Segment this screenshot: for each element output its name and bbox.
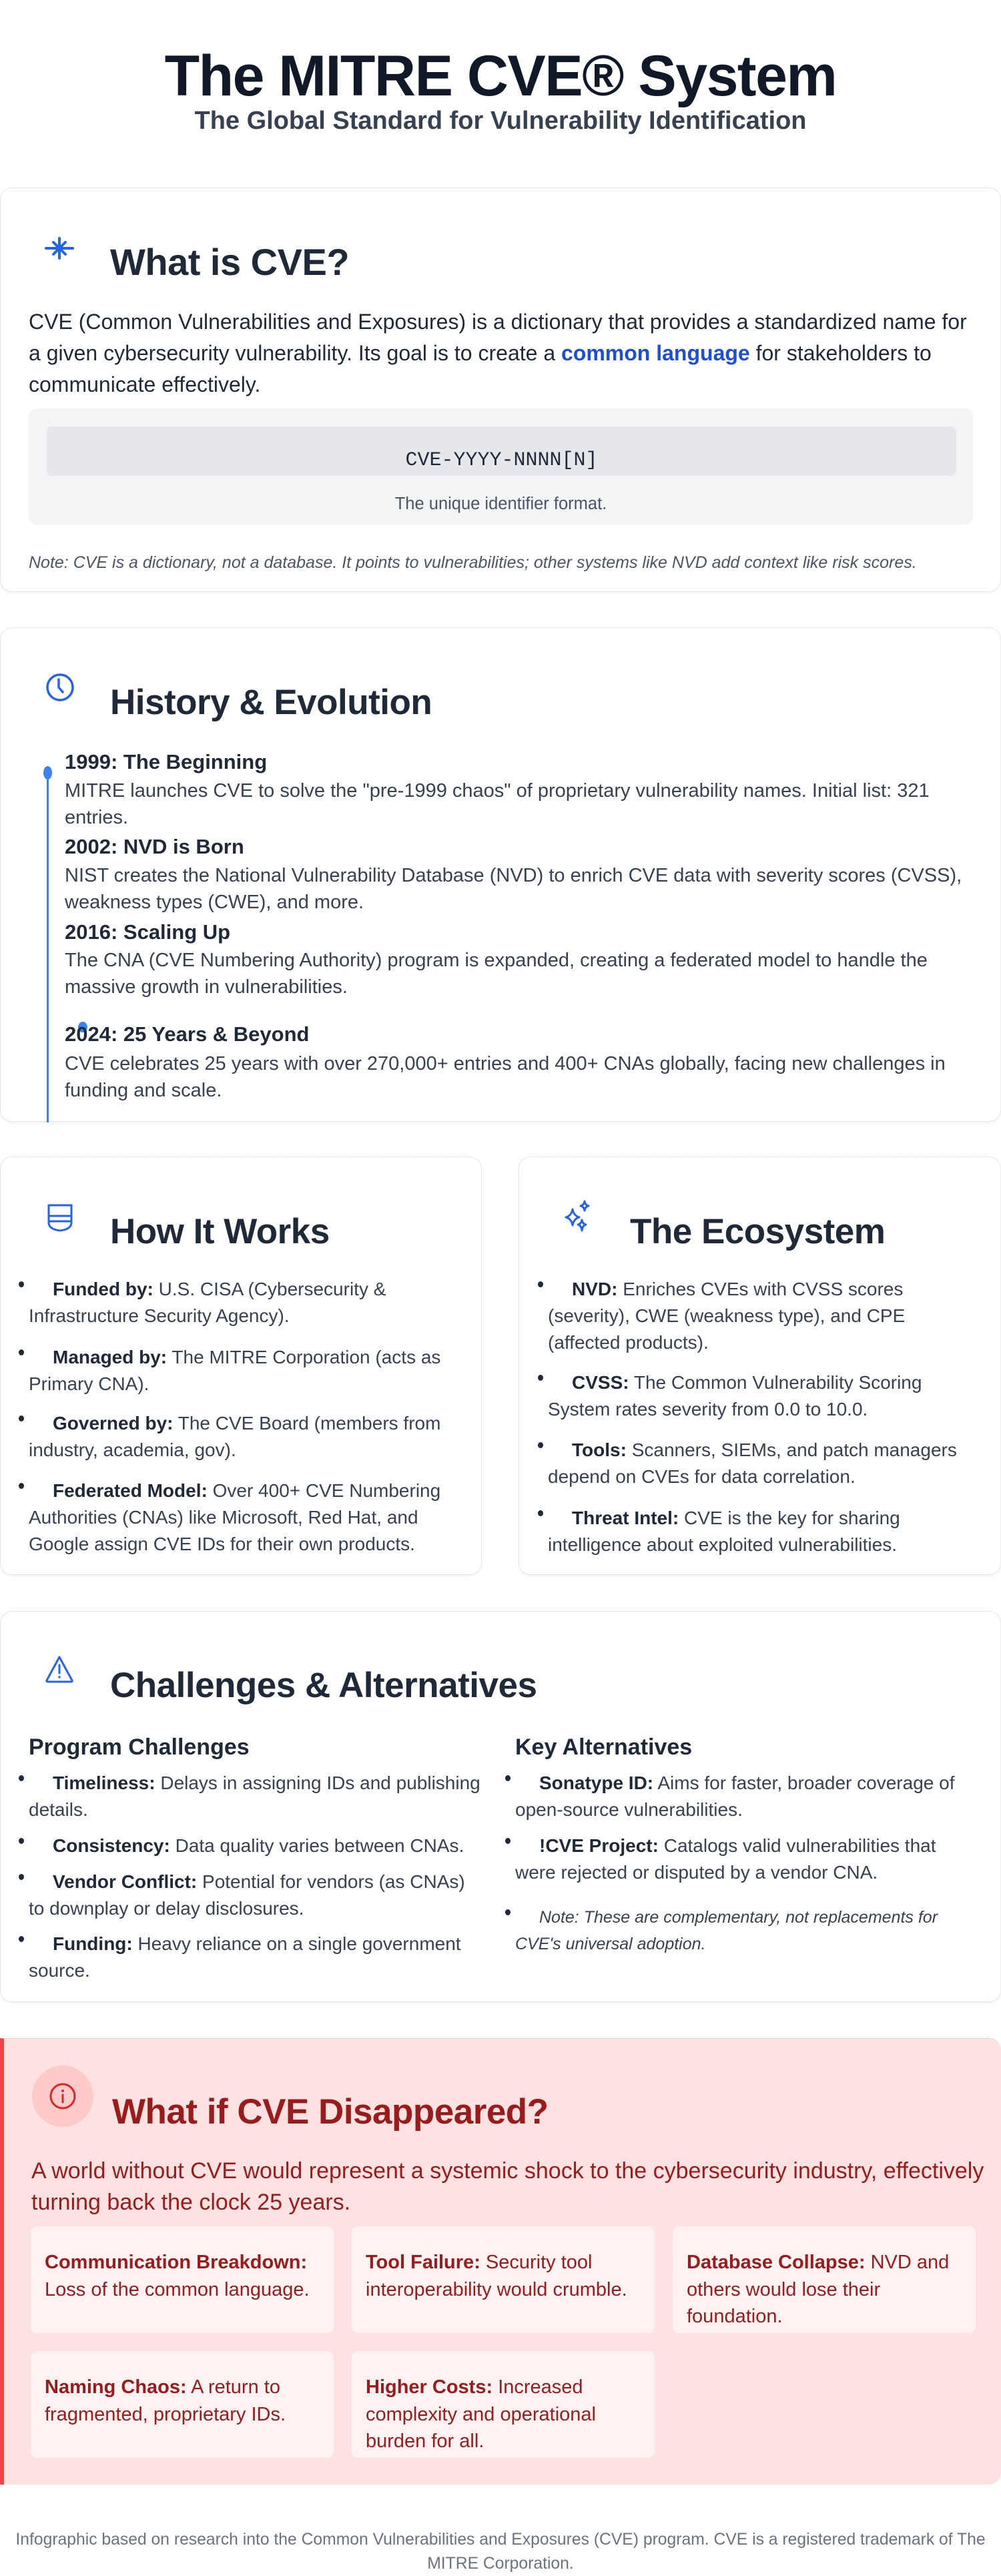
impact: database collapse: others would lose their bbox=[687, 2278, 880, 2300]
impact: higher costs: Higher Costs: Increased bbox=[366, 2376, 583, 2398]
text block: definition: communicate effectively. bbox=[29, 372, 260, 396]
column: program challenges: Consistency: Data quality varies between CNAs. bbox=[53, 1835, 464, 1856]
bullet list: ecosystem: Threat Intel: CVE is the key for sharing bbox=[572, 1508, 900, 1528]
timeline item 2016: massive growth in vulnerabilities. bbox=[65, 976, 348, 998]
bullet list: ecosystem: CVSS: The Common Vulnerability Scoring bbox=[572, 1372, 922, 1393]
panel: what is CVE bbox=[0, 188, 1001, 592]
column: program challenges: details. bbox=[29, 1799, 88, 1820]
timeline item 1999: entries. bbox=[65, 807, 128, 828]
impact: higher costs: complexity and operational bbox=[366, 2404, 596, 2425]
impact: database collapse: foundation. bbox=[687, 2306, 783, 2327]
column: program challenges: to downplay or delay disclosures. bbox=[29, 1898, 304, 1919]
impact: database collapse: Database Collapse: NVD and bbox=[687, 2252, 949, 2273]
icon: clock bbox=[46, 673, 74, 701]
bullet list: ecosystem bbox=[538, 1279, 957, 1555]
column: key alternatives bbox=[505, 1734, 955, 1953]
impact: communication: Loss of the common language. bbox=[45, 2278, 310, 2300]
heading: ecosystem: The Ecosystem bbox=[630, 1212, 885, 1251]
column: program challenges: source. bbox=[29, 1960, 90, 1981]
text block: systemic shock: A world without CVE would represent a systemic shock to the cybersecurity industry, effectively bbox=[31, 2158, 984, 2184]
impact: database collapse bbox=[673, 2226, 976, 2333]
bullet list: ecosystem: depend on CVEs for data correlation. bbox=[548, 1466, 856, 1487]
panel: how it works bbox=[0, 1157, 482, 1575]
footer: Infographic based on research into the Common Vulnerabilities and Exposures (CVE) program. CVE is a registered trademark of The bbox=[15, 2531, 986, 2549]
subtitle: The Global Standard for Vulnerability Identification bbox=[194, 107, 806, 135]
column: key alternatives: CVE's universal adoption. bbox=[515, 1935, 706, 1953]
timeline item 2024 bbox=[65, 1022, 946, 1101]
code: identifier bbox=[47, 426, 956, 476]
icon: shield bbox=[48, 1204, 72, 1232]
panel: history bbox=[0, 627, 1001, 1122]
text block: definition bbox=[29, 310, 967, 396]
panel: challenges & alternatives bbox=[0, 1611, 1001, 2002]
timeline dot bbox=[43, 766, 52, 779]
code: identifier: CVE-YYYY-NNNN[N] bbox=[405, 449, 598, 472]
bullet list: how it works: industry, academia, gov). bbox=[29, 1439, 236, 1460]
impact: naming chaos: fragmented, proprietary IDs. bbox=[45, 2404, 286, 2425]
panel: what if CVE disappeared bbox=[0, 2038, 1001, 2485]
column: key alternatives: Note: These are complementary, not replacements for bbox=[539, 1908, 938, 1927]
column: program challenges: Vendor Conflict: Potential for vendors (as CNAs) bbox=[53, 1871, 465, 1892]
impact: naming chaos bbox=[31, 2351, 334, 2458]
timeline item 2002: weakness types (CWE), and more. bbox=[65, 892, 364, 913]
timeline item 2024: CVE celebrates 25 years with over 270,000+ entries and 400+ CNAs globally, facing new challenges in bbox=[65, 1053, 946, 1074]
icon: sparkles bbox=[565, 1200, 590, 1232]
impact: communication bbox=[31, 2226, 334, 2333]
timeline item 2016 bbox=[65, 920, 928, 998]
text block: definition: a given cybersecurity vulnerability. Its goal is to create a common language for stakeholders to bbox=[29, 341, 932, 365]
bullet list: how it works: Infrastructure Security Agency). bbox=[29, 1305, 290, 1326]
impact: higher costs: burden for all. bbox=[366, 2431, 484, 2452]
heading: What is CVE?: What is CVE? bbox=[110, 241, 349, 283]
column: key alternatives: were rejected or disputed by a vendor CNA. bbox=[515, 1862, 878, 1883]
bullet list: how it works: Google assign CVE IDs for their own products. bbox=[29, 1534, 415, 1554]
bullet list: how it works: Primary CNA). bbox=[29, 1373, 149, 1394]
timeline item 1999 bbox=[65, 750, 930, 828]
timeline item 2016: The CNA (CVE Numbering Authority) program is expanded, creating a federated model to handle the bbox=[65, 950, 928, 971]
impact: higher costs bbox=[352, 2351, 655, 2458]
subheading: Key Alternatives bbox=[515, 1734, 692, 1760]
timeline item 2002: 2002: NVD is Born bbox=[65, 835, 244, 858]
timeline item 1999: MITRE launches CVE to solve the "pre-1999 chaos" of proprietary vulnerability names. Initial list: 321 bbox=[65, 780, 930, 801]
timeline dot 2024 bbox=[78, 1022, 87, 1032]
caption: The unique identifier format. bbox=[395, 495, 607, 513]
heading: how it works: How It Works bbox=[110, 1212, 330, 1251]
note: Note: CVE is a dictionary, not a database. It points to vulnerabilities; other systems like NVD add context like risk scores. bbox=[29, 553, 917, 572]
bullet list: ecosystem: Tools: Scanners, SIEMs, and patch managers bbox=[572, 1439, 957, 1460]
bullet list: how it works: Managed by: The MITRE Corporation (acts as bbox=[53, 1347, 440, 1367]
title: The MITRE CVE® System bbox=[165, 44, 836, 108]
timeline item 2002: NIST creates the National Vulnerability Database (NVD) to enrich CVE data with severity scores (CVSS), bbox=[65, 865, 962, 886]
bullet list: ecosystem: NVD: Enriches CVEs with CVSS scores bbox=[572, 1279, 903, 1299]
text block: systemic shock bbox=[31, 2158, 984, 2215]
subheading: Program Challenges bbox=[29, 1734, 250, 1760]
timeline item 2024: 2024: 25 Years & Beyond bbox=[65, 1022, 309, 1046]
timeline item 2024: funding and scale. bbox=[65, 1080, 222, 1101]
column: program challenges: Timeliness: Delays in assigning IDs and publishing bbox=[53, 1773, 480, 1793]
heading: history: History & Evolution bbox=[110, 683, 432, 722]
bullet list: how it works: Funded by: U.S. CISA (Cybersecurity & bbox=[53, 1279, 386, 1299]
icon: warning bbox=[45, 1656, 73, 1683]
impact: tool failure: interoperability would crumble. bbox=[366, 2278, 627, 2300]
bullet list: how it works: Governed by: The CVE Board (members from bbox=[53, 1413, 440, 1433]
footer: MITRE Corporation. bbox=[427, 2555, 574, 2573]
timeline item 1999: 1999: The Beginning bbox=[65, 750, 267, 773]
icon: info circle bbox=[32, 2065, 93, 2127]
timeline item 2002 bbox=[65, 835, 962, 913]
impact: tool failure: Tool Failure: Security tool bbox=[366, 2252, 593, 2273]
text block: definition: CVE (Common Vulnerabilities and Exposures) is a dictionary that provides a standardized name for bbox=[29, 310, 967, 334]
column: key alternatives: !CVE Project: Catalogs valid vulnerabilities that bbox=[539, 1835, 936, 1856]
heading: disappeared: What if CVE Disappeared? bbox=[112, 2092, 549, 2132]
bullet list: ecosystem: (affected products). bbox=[548, 1332, 709, 1353]
column: key alternatives: open-source vulnerabilities. bbox=[515, 1799, 743, 1820]
impact: naming chaos: Naming Chaos: A return to bbox=[45, 2376, 280, 2398]
icon: asterisk bbox=[45, 237, 74, 260]
bullet list: how it works: Federated Model: Over 400+ CVE Numbering bbox=[53, 1480, 440, 1501]
impact: tool failure bbox=[352, 2226, 655, 2333]
column: program challenges bbox=[19, 1734, 480, 1981]
timeline item 2016: 2016: Scaling Up bbox=[65, 920, 230, 944]
identifier format box bbox=[29, 408, 973, 525]
bullet list: how it works bbox=[19, 1279, 440, 1554]
panel: ecosystem bbox=[519, 1157, 1001, 1575]
bullet list: ecosystem: intelligence about exploited vulnerabilities. bbox=[548, 1534, 897, 1555]
impact: communication: Communication Breakdown: bbox=[45, 2252, 307, 2273]
bullet list: how it works: Authorities (CNAs) like Microsoft, Red Hat, and bbox=[29, 1507, 418, 1528]
timeline line bbox=[47, 771, 49, 1122]
heading: challenges: Challenges & Alternatives bbox=[110, 1666, 537, 1705]
footer bbox=[15, 2531, 986, 2573]
bullet list: ecosystem: (severity), CWE (weakness type), and CPE bbox=[548, 1305, 905, 1326]
column: key alternatives: Sonatype ID: Aims for faster, broader coverage of bbox=[539, 1773, 954, 1793]
column: program challenges: Funding: Heavy reliance on a single government bbox=[53, 1933, 461, 1954]
text block: systemic shock: turning back the clock 25 years. bbox=[31, 2190, 350, 2215]
bullet list: ecosystem: System rates severity from 0.0 to 10.0. bbox=[548, 1399, 868, 1419]
